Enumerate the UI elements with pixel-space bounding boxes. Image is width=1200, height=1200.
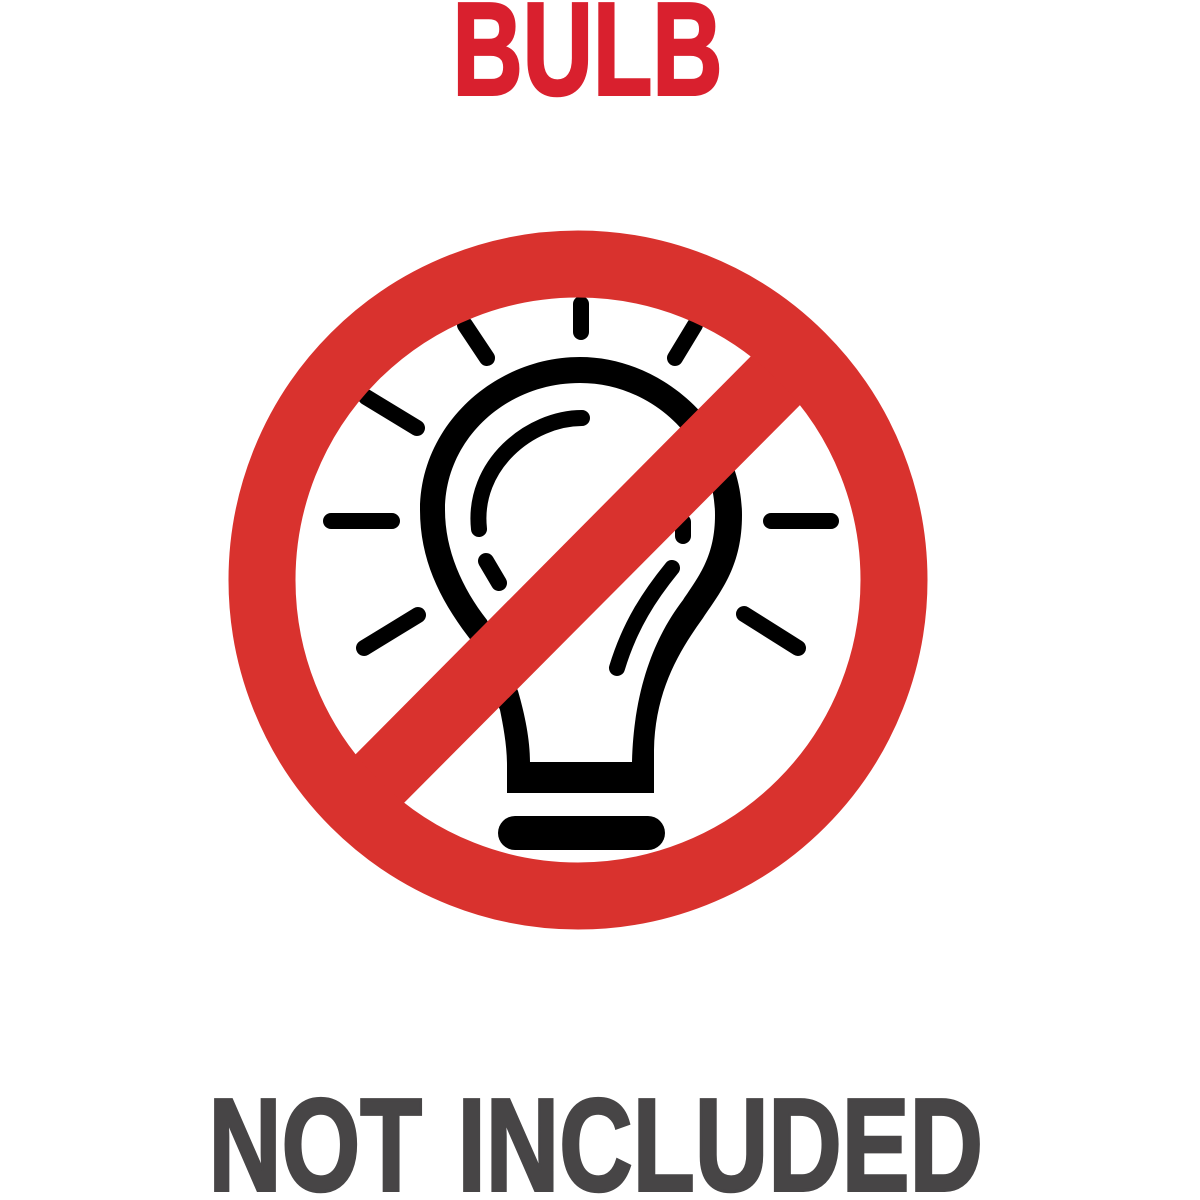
icon: bulb base bbox=[498, 816, 665, 850]
icon: bulb inner highlights bbox=[478, 418, 683, 668]
icon: crossed-out light bulb bbox=[262, 264, 894, 896]
icon: light rays bbox=[331, 304, 831, 648]
icon: red prohibition slash bbox=[337, 337, 820, 820]
icon: red prohibition ring bbox=[262, 264, 894, 896]
caption: NOT INCLUDED bbox=[208, 1072, 983, 1200]
icon: bulb outline bbox=[420, 357, 742, 793]
